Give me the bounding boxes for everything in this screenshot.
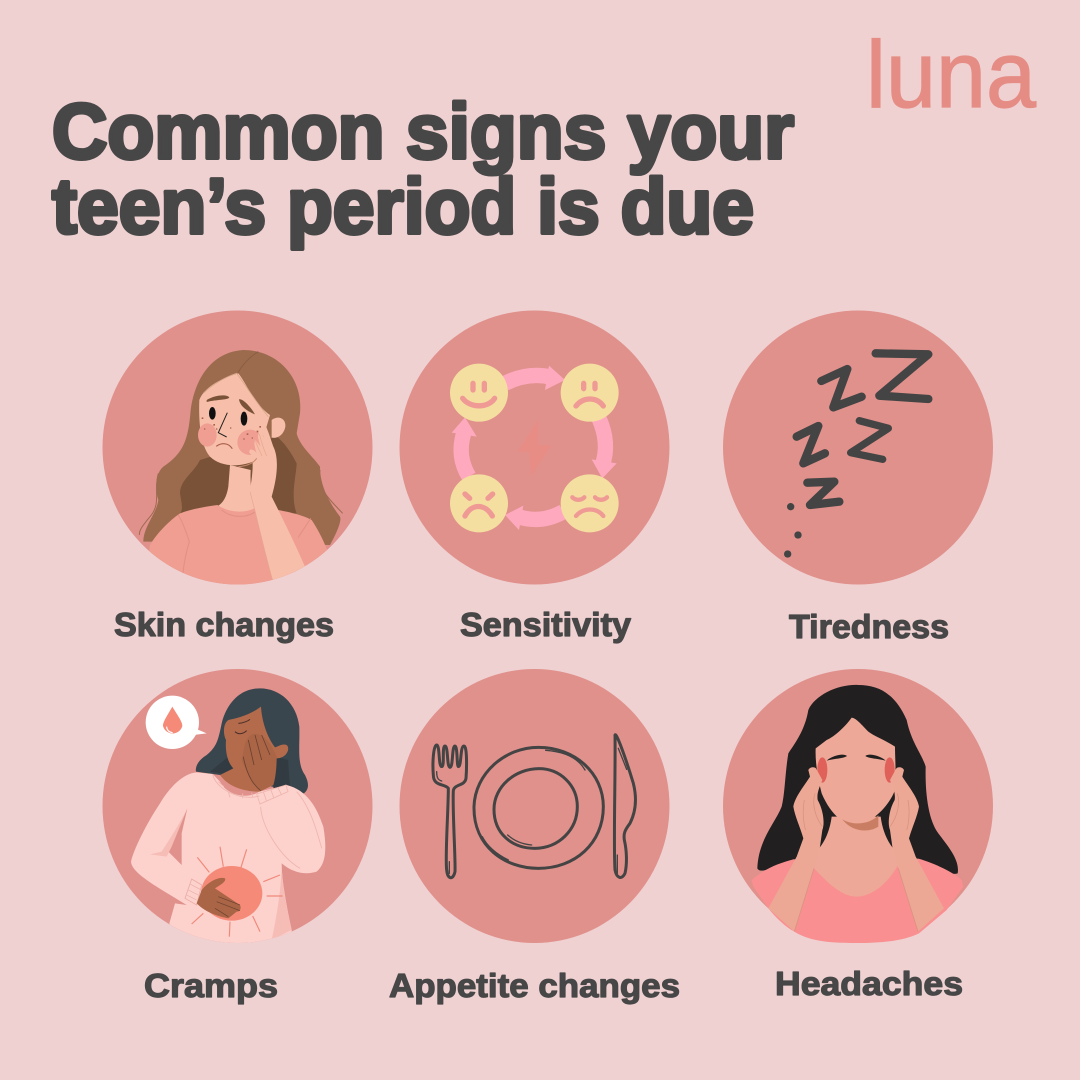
panel: sensitivity: [400, 310, 670, 643]
label: skin changes: Skin changes: [114, 606, 334, 643]
label: headaches: Headaches: [775, 965, 963, 1002]
title: teen’s period is due: [52, 162, 754, 250]
icon: sleeping zzz: [784, 353, 928, 558]
icon: plate and cutlery: [433, 735, 635, 878]
title: Common signs your: [52, 87, 794, 175]
label: tiredness: Tiredness: [789, 608, 949, 645]
panel: headaches: [723, 669, 993, 1002]
label: sensitivity: Sensitivity: [460, 606, 632, 643]
illustration: girl with cramps: [131, 688, 325, 953]
label: cramps: Cramps: [144, 967, 278, 1004]
panel: tiredness: [723, 310, 993, 645]
panel: cramps: [102, 669, 372, 1004]
logo: luna: luna: [866, 22, 1036, 128]
illustration: woman with headache: [752, 685, 963, 943]
illustration: girl with acne: [139, 350, 343, 593]
illustration: mood cycle faces: [450, 364, 619, 532]
title: [52, 87, 794, 250]
panel: appetite changes: [389, 669, 680, 1004]
panel: skin changes: [102, 310, 372, 643]
label: appetite changes: Appetite changes: [389, 967, 680, 1004]
